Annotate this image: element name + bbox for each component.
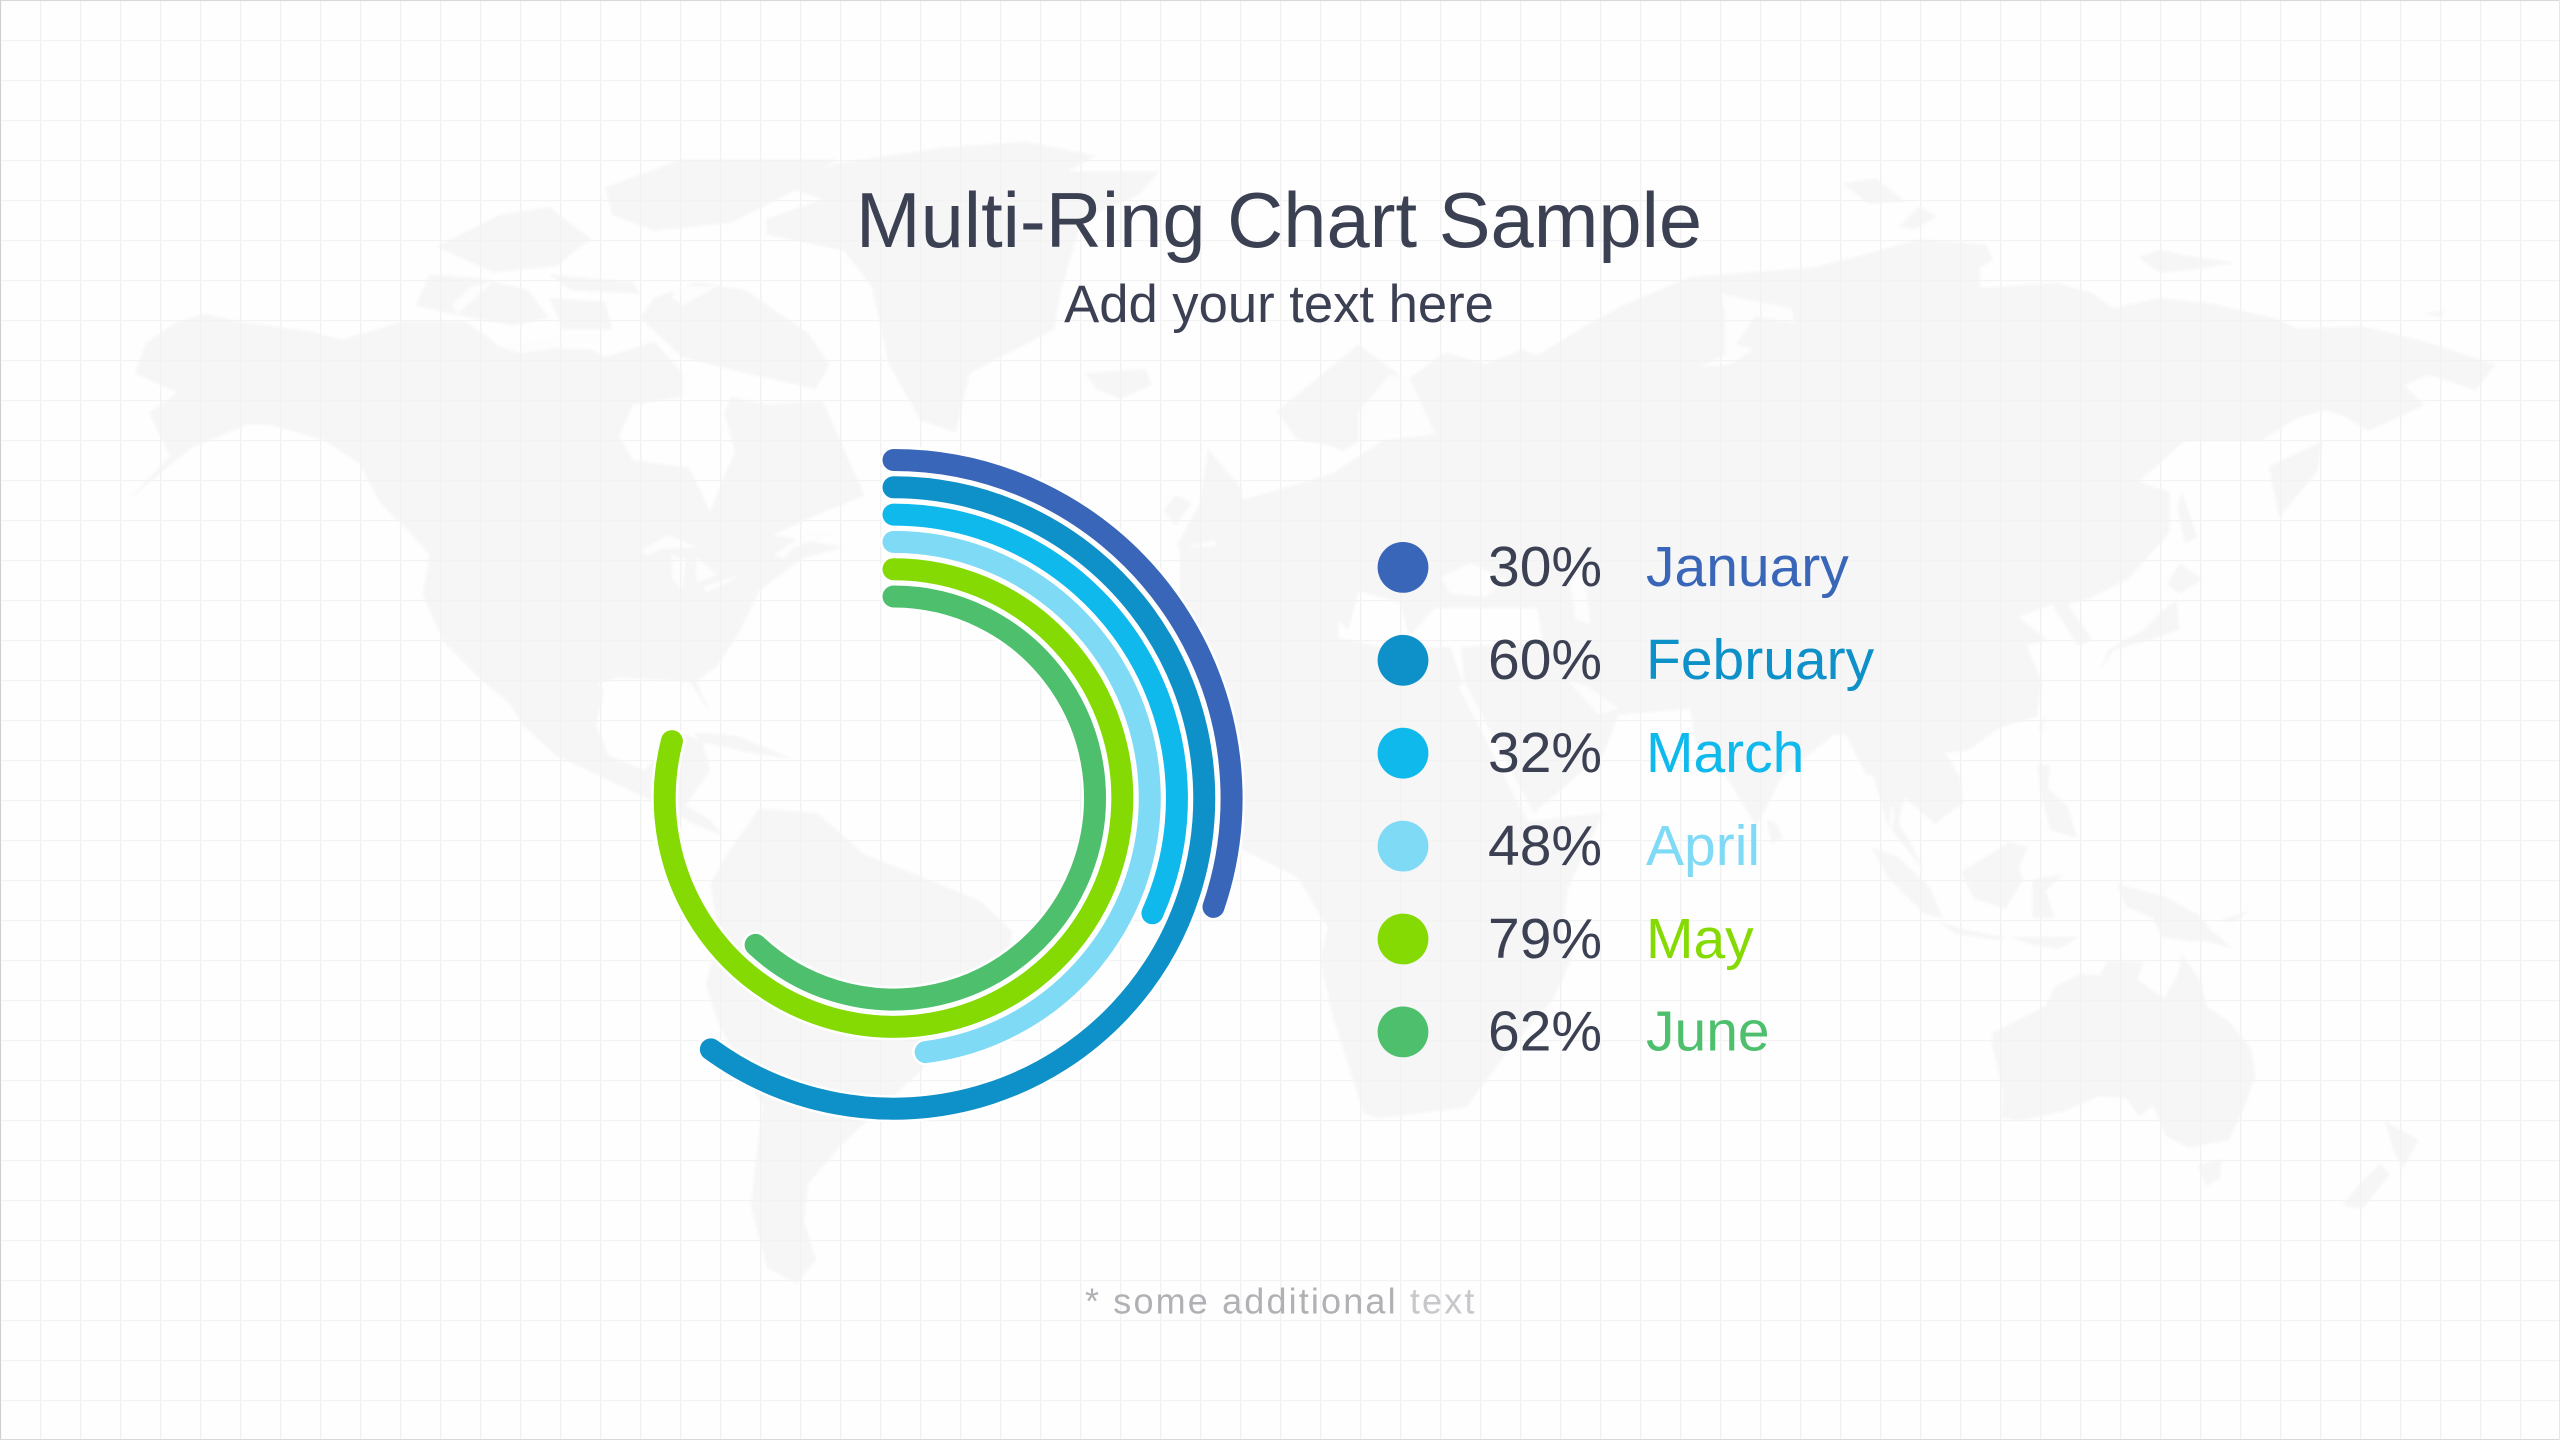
footnote: * some additional text [1085,1280,1477,1322]
legend row: January: 30% [1488,535,1602,599]
ring: April 48% [894,542,1150,1052]
legend row: March: March [1646,721,1804,785]
legend row: May: 79% [1488,907,1602,971]
legend row: January [1378,535,1849,599]
legend row: June [1378,1000,1770,1064]
map: Southeast Asia and Oceania [1769,700,2418,1209]
map: Mexico and Central America [445,449,1339,1283]
legend row: March: 32% [1488,721,1602,785]
ring: May 79% [665,569,1122,1027]
multi-ring chart [665,460,1232,1109]
legend row: January: January [1646,535,1849,599]
legend row: April: 48% [1488,814,1602,878]
map: Northern and East Asia [1700,178,2496,829]
map: British Isles and Iberia [1175,449,1249,549]
map: Europe, West Asia and Africa [1180,254,1980,1119]
legend row: June: June [1646,1000,1770,1064]
subtitle: Add your text here [1064,275,1494,334]
map: northern Russia inlets [1700,293,1794,367]
legend row: April: April [1646,814,1760,878]
title: Multi-Ring Chart Sample [856,178,1702,264]
map: South America [706,809,1012,1283]
map: Australia and New Zealand [1992,954,2256,1148]
legend row: February: 60% [1488,628,1602,692]
ring: January 30% [894,460,1232,907]
legend row: April [1378,814,1760,878]
legend row: May: May [1646,907,1754,971]
map: North America lakes [451,282,844,593]
world map background [128,142,2496,1283]
legend row: June: 62% [1488,1000,1602,1064]
ring: March 32% [894,515,1177,913]
legend row: May [1378,907,1754,971]
map: North America [128,142,1159,740]
map: inland seas [1359,375,1619,821]
ring: February 60% [711,487,1204,1109]
legend row: March [1378,721,1804,785]
legend [1378,535,1875,1064]
legend row: February: February [1646,628,1875,692]
ring: June 62% [756,596,1095,1000]
ring separators [665,460,1232,1109]
legend row: February [1378,628,1875,692]
